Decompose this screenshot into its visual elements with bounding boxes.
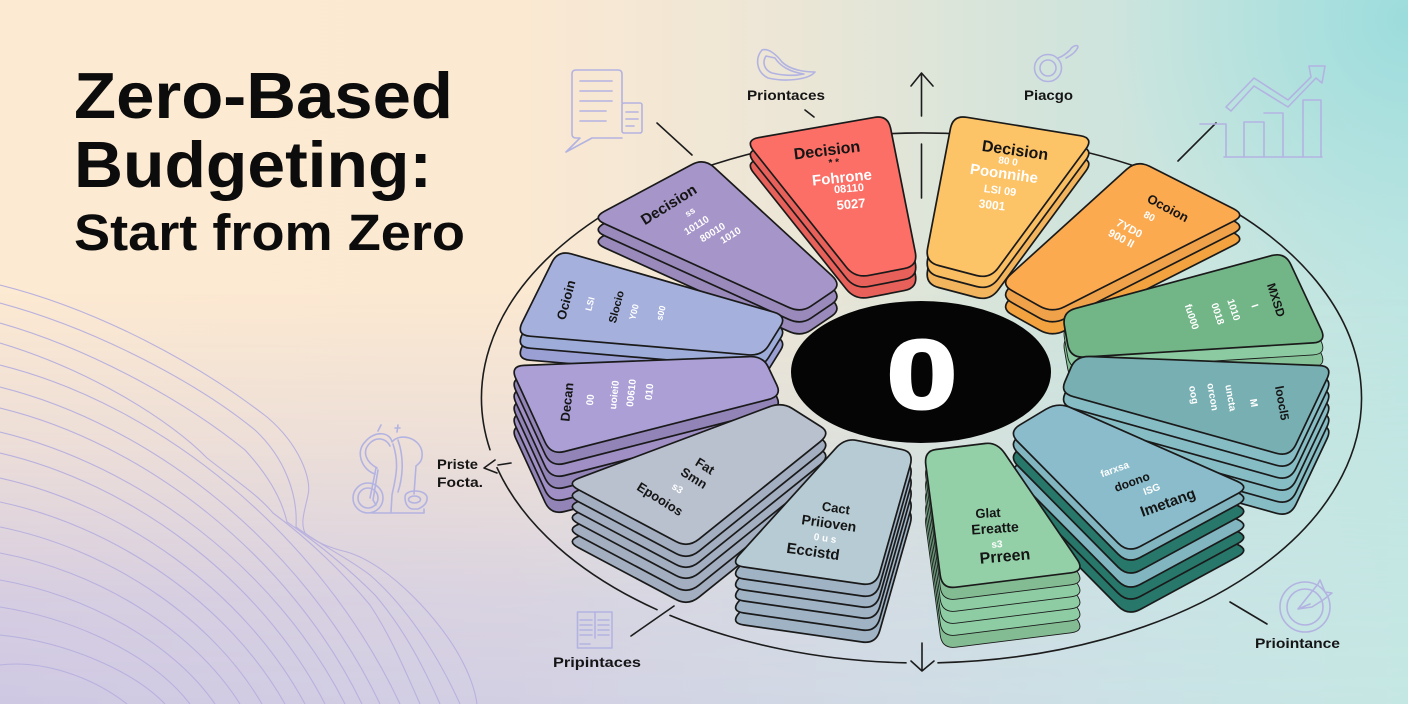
- card: green: 0018: [1208, 302, 1226, 327]
- card: green: 1010: [1224, 298, 1242, 323]
- card: periwinkle: Ocioin: [554, 278, 578, 321]
- card: sky blue with dark teal layers: doono: [1112, 469, 1152, 495]
- arrow: top: [911, 73, 933, 198]
- leader lines: [484, 110, 1267, 636]
- card: light green: Prreen: [979, 546, 1031, 568]
- outer ring: [482, 133, 1362, 663]
- card: yellow decision: [927, 117, 1089, 298]
- center circle with zero: 0: [887, 320, 957, 429]
- title: Budgeting:: [74, 128, 432, 201]
- card: yellow decision: LSI 09: [983, 183, 1017, 199]
- label: Piacgo: Piacgo: [1024, 87, 1073, 103]
- card: teal: oog: [1186, 385, 1200, 405]
- card: red decision: 5027: [836, 195, 866, 213]
- label: Priste Focta: Priste: [437, 456, 478, 472]
- card: lavender: Decan: [558, 382, 577, 422]
- card: yellow decision: Poonnihe: [969, 161, 1039, 187]
- card: slate blue: Cact: [821, 499, 852, 517]
- card: periwinkle: Y00: [627, 303, 641, 321]
- icon: target with pen: [1280, 580, 1332, 632]
- icon: skeleton shape: [353, 425, 427, 513]
- card: lavender: uoiei0: [608, 380, 622, 410]
- card: yellow decision: Decision: [981, 138, 1049, 164]
- icon: ring: [1034, 46, 1078, 82]
- card: purple decision: 80010: [698, 221, 728, 245]
- card: red decision: Fohrone: [811, 166, 873, 190]
- label: Priste Focta: [437, 456, 483, 490]
- label: Priste Focta: Focta.: [437, 474, 483, 490]
- card: light green: s3: [991, 539, 1003, 551]
- card: light green: Ereatte: [971, 518, 1019, 538]
- card: periwinkle: Slocio: [607, 289, 627, 324]
- card: amber: [1006, 164, 1240, 334]
- card: lavender: 00: [585, 393, 597, 406]
- label: Pripintaces: Pripintaces: [553, 654, 641, 670]
- label: Priontaces: Priontaces: [747, 87, 825, 103]
- card: periwinkle: [520, 253, 783, 379]
- card: lavender: [514, 357, 778, 512]
- card: purple decision: Decision: [638, 181, 700, 229]
- card: teal: orcon: [1204, 382, 1220, 412]
- icon: growth chart: [1200, 66, 1325, 157]
- card: amber: 900 II: [1106, 227, 1136, 251]
- card: light green: [926, 443, 1080, 647]
- card: green: I: [1248, 303, 1260, 309]
- card: gray: Epooios: [634, 479, 686, 519]
- card: purple decision: 1010: [719, 225, 744, 247]
- card: gray: Fat: [693, 454, 718, 478]
- card: red decision: 08110: [834, 182, 864, 196]
- card: red decision: [750, 117, 916, 298]
- label: Priointance: Priointance: [1255, 635, 1340, 651]
- card: periwinkle: s00: [654, 304, 668, 322]
- card: green: MXSD: [1264, 281, 1288, 319]
- card: slate blue: Eccistd: [785, 540, 841, 564]
- card: green: fu000: [1182, 303, 1200, 332]
- card: lavender: 010: [644, 383, 656, 401]
- card: yellow decision: 3001: [978, 196, 1006, 214]
- card: sky blue with dark teal layers: [1013, 405, 1244, 612]
- card: sky blue with dark teal layers: farxsa: [1099, 460, 1131, 480]
- card: teal: [1064, 356, 1329, 514]
- card: lavender: 00610: [625, 378, 639, 407]
- card: periwinkle: LSI: [583, 296, 597, 312]
- card: green: [1064, 255, 1323, 381]
- card: yellow decision: 80 0: [998, 155, 1019, 169]
- card: teal: M: [1247, 398, 1259, 408]
- card: slate blue: 0 u s: [813, 532, 837, 546]
- card: amber: 7YD0: [1114, 217, 1144, 241]
- title: Start from Zero: [74, 204, 465, 261]
- center circle with zero: [791, 301, 1051, 443]
- title: [74, 59, 465, 261]
- icon: curved bowl: [758, 50, 815, 80]
- card: slate blue: Priioven: [801, 511, 857, 535]
- card: purple decision: ss: [683, 205, 697, 219]
- card: gray: s3: [669, 481, 685, 497]
- card: amber: 80: [1142, 210, 1157, 225]
- card: purple decision: 10110: [683, 214, 712, 238]
- card: slate blue: [736, 440, 911, 642]
- arrow: bottom: [911, 643, 934, 671]
- card: red decision: * *: [828, 157, 840, 169]
- title: Zero-Based: [74, 59, 453, 132]
- card: light green: Glat: [975, 505, 1002, 521]
- card: red decision: Decision: [793, 138, 861, 164]
- card: gray: [572, 405, 826, 602]
- card: teal: loocl5: [1272, 385, 1292, 422]
- card: sky blue with dark teal layers: ISG: [1142, 482, 1162, 498]
- card: gray: Smn: [678, 464, 710, 492]
- card: sky blue with dark teal layers: Imetang: [1138, 485, 1198, 521]
- decorative wave lines: [0, 285, 477, 704]
- card: teal: uncta: [1222, 384, 1238, 413]
- card: amber: Ocoion: [1145, 191, 1191, 225]
- icon: document with speech tail: [566, 70, 642, 152]
- card: purple decision: [598, 162, 837, 334]
- icon: open book: [578, 612, 612, 648]
